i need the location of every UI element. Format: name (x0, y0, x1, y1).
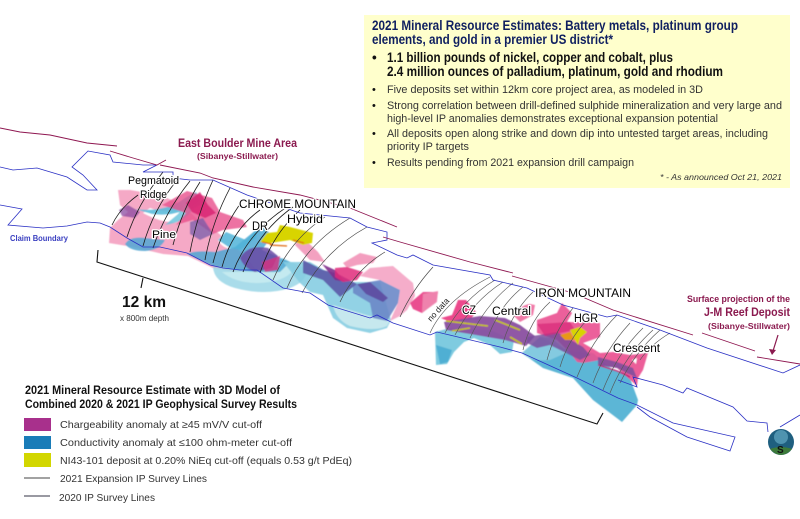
purple west tip (119, 205, 140, 218)
pink Crescent (600, 352, 648, 386)
legend title (25, 385, 297, 411)
J-M Reef callout (687, 294, 790, 331)
bullet list: Results pending from 2021 expansion drill campaign (387, 157, 634, 169)
map labels: HGR (574, 313, 598, 325)
bullet list: Strong correlation between drill-defined sulphide mineralization and very large and (387, 100, 782, 112)
map labels: no data (425, 296, 451, 323)
map labels: CZ (462, 305, 476, 317)
light pink lobe (360, 266, 415, 321)
panel heading: 2021 Mineral Resource Estimates: Battery metals, platinum group (372, 18, 738, 33)
magenta upper (162, 191, 247, 234)
claim boundary lines (0, 151, 800, 451)
key figures (372, 50, 723, 79)
white gaps (143, 206, 196, 222)
panel: resource summary (364, 15, 790, 188)
hot pink lobes east (335, 267, 363, 282)
map labels (10, 138, 661, 355)
mine boundary lines (0, 128, 800, 364)
cyan upper bands (135, 192, 200, 215)
bullet list (372, 84, 782, 169)
compass globe (768, 429, 794, 456)
map labels: DR (252, 221, 268, 233)
cyan east body (522, 337, 638, 422)
legend labels: 2020 IP Survey Lines (59, 492, 155, 504)
pink lobe Central (514, 304, 535, 322)
footnote: * - As announced Oct 21, 2021 (660, 172, 782, 182)
bullet list: • (372, 100, 376, 112)
legend title: 2021 Mineral Resource Estimate with 3D Model of (25, 385, 280, 397)
legend labels: 2021 Expansion IP Survey Lines (60, 473, 207, 485)
cyan ring around white gap (218, 228, 258, 250)
map labels: Pine (152, 229, 176, 241)
bullet list: priority IP targets (387, 141, 469, 153)
pink CZ (441, 300, 476, 322)
3D map: Chrome Mountain anomalies (109, 190, 438, 333)
panel heading (372, 18, 738, 47)
bullet list: • (372, 84, 376, 96)
purple strip CZ Central (444, 316, 535, 346)
bullet list: • (372, 157, 376, 169)
legend title: Combined 2020 & 2021 IP Geophysical Survey Results (25, 399, 297, 411)
cyan bulb two (283, 262, 391, 333)
bullet list: Five deposits set within 12km core project area, as modeled in 3D (387, 84, 703, 96)
compass globe: S (777, 445, 784, 456)
cyan west body (435, 328, 514, 365)
legend labels: NI43-101 deposit at 0.20% NiEq cut-off (equals 0.53 g/t PdEq) (60, 455, 352, 467)
map labels: IRON MOUNTAIN (535, 288, 631, 300)
map labels: Claim Boundary (10, 233, 68, 243)
J-M Reef callout: J-M Reef Deposit (704, 305, 790, 319)
bullet list: high-level IP anomalies demonstrates exceptional expansion potential (387, 113, 718, 125)
legend labels: Chargeability anomaly at ≥45 mV/V cut-off (60, 419, 262, 431)
J-M Reef callout: (Sibanye-Stillwater) (708, 321, 790, 331)
pink right of yellow (295, 235, 325, 262)
map labels: (Sibanye-Stillwater) (197, 151, 278, 161)
pink HGR (537, 303, 600, 363)
yellow HGR deposit (570, 327, 587, 345)
key figures: 1.1 billion pounds of nickel, copper and cobalt, plus (387, 50, 673, 65)
scale label: 12 km (122, 294, 166, 311)
yellow Hybrid deposit (260, 225, 313, 245)
map labels: Crescent (613, 343, 661, 355)
cyan bulb one (213, 258, 306, 292)
blue band mid (187, 225, 290, 272)
bullet list: • (372, 128, 376, 140)
map labels: CHROME MOUNTAIN (239, 197, 356, 211)
map labels: Ridge (140, 189, 167, 201)
light pink base west (109, 190, 257, 271)
map labels: East Boulder Mine Area (178, 138, 298, 150)
legend swatches (24, 418, 51, 496)
scale bracket (97, 250, 603, 424)
legend labels (59, 419, 352, 504)
key figures: 2.4 million ounces of palladium, platinum, gold and rhodium (387, 64, 723, 79)
map labels: Central (492, 306, 531, 318)
3D map: Iron Mountain anomalies (435, 300, 648, 422)
panel heading: elements, and gold in a premier US district* (372, 32, 614, 47)
map labels: Pegmatoid (128, 175, 179, 187)
J-M Reef callout: Surface projection of the (687, 294, 790, 304)
survey lines: 2020 and 2021 (112, 172, 670, 393)
scale label: x 800m depth (120, 314, 169, 323)
legend labels: Conductivity anomaly at ≤100 ohm-meter cut-off (60, 437, 292, 449)
bullet list: All deposits open along strike and down dip into untested target areas, including (387, 128, 768, 140)
dark central strip (303, 260, 357, 297)
key figures: • (372, 50, 377, 65)
scale label (120, 294, 169, 323)
legend (24, 385, 352, 504)
Pine blue (125, 238, 165, 251)
arrow: reef deposit (769, 335, 778, 355)
map labels: Hybrid (287, 212, 323, 226)
blue-purple lobe (353, 280, 400, 321)
